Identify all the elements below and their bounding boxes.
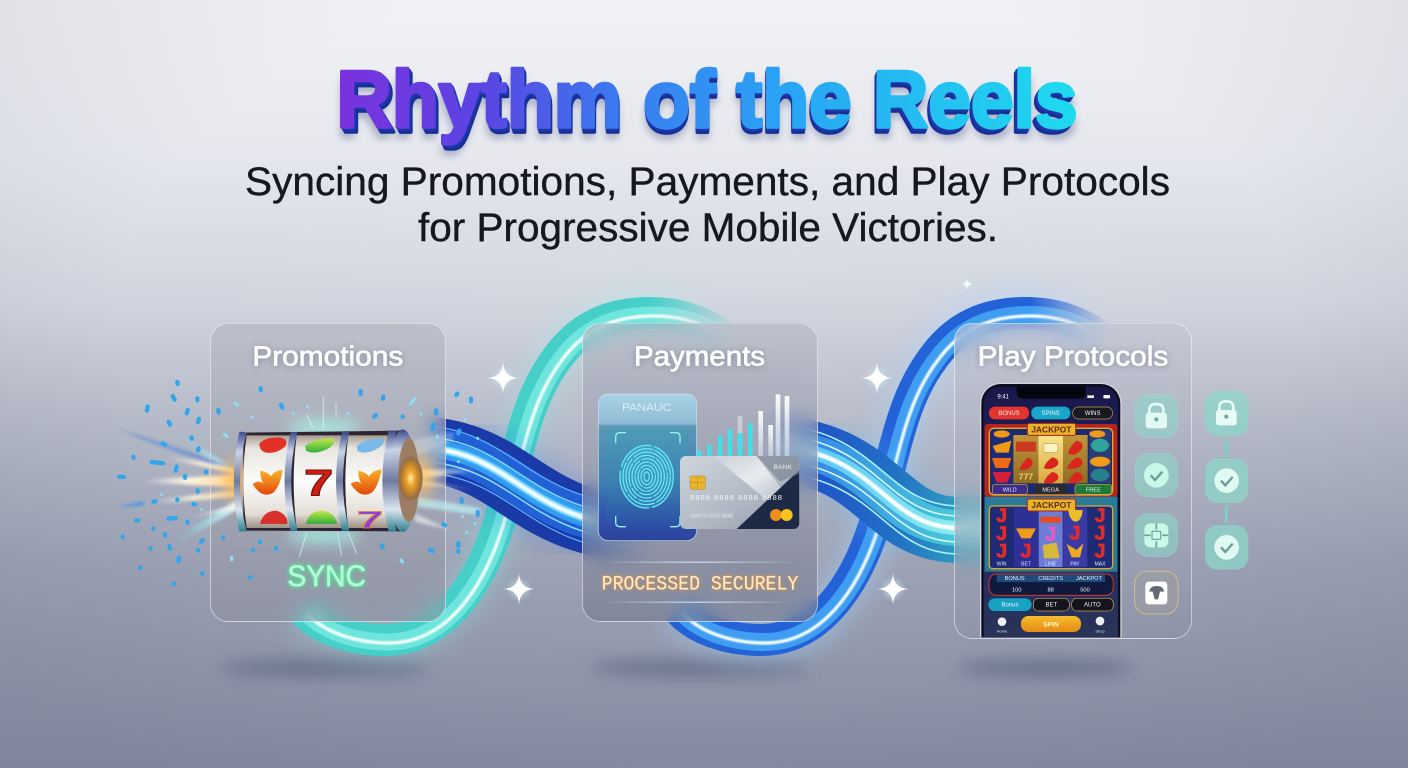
- slot game two: J: [996, 506, 1007, 526]
- phone with slot game: [980, 382, 1121, 659]
- slot game two: BET: [1021, 561, 1030, 567]
- action buttons: Bonus: [1001, 602, 1018, 608]
- subtitle: for Progressive Mobile Victories.: [418, 206, 998, 250]
- title: Rhythm of the Reels: [340, 60, 1074, 150]
- phone with slot game: 9:41: [997, 394, 1009, 400]
- slot game two: J: [996, 541, 1007, 562]
- heading: Promotions: Promotions: [252, 340, 403, 371]
- vertical rays: [299, 396, 356, 556]
- slot game two: JACKPOT: [1031, 500, 1071, 510]
- slot game two: PAY: [1070, 561, 1080, 567]
- flowing ribbons background: [225, 289, 1129, 684]
- glow around reel: [224, 420, 433, 542]
- SYNC label: SYNC: [287, 560, 365, 592]
- slot game two: J: [1094, 541, 1105, 562]
- icon: lock: [1205, 391, 1248, 436]
- spin button and side icons: Home: [996, 628, 1008, 633]
- reel symbols: [252, 437, 384, 534]
- icon: shield tile: [1134, 571, 1178, 614]
- heading: Payments: Payments: [634, 340, 764, 371]
- credit card: 8888 8888 8888 8888: [690, 492, 782, 502]
- title: Rhythm of the Reels: [337, 65, 1077, 155]
- credit card: CARDHOLDER NAME: [690, 513, 734, 519]
- slot game one: FREE: [1085, 487, 1101, 493]
- icon: grid: [1134, 513, 1177, 556]
- slot game two: MAX: [1094, 561, 1106, 567]
- bar chart: [696, 394, 789, 457]
- slot game two: LINE: [1045, 561, 1056, 567]
- slot game one: JACKPOT: [1031, 424, 1071, 434]
- reel symbols: 7: [304, 461, 333, 503]
- subtitle: Syncing Promotions, Payments, and Play Protocols: [245, 160, 1170, 204]
- icon: check: [1205, 525, 1248, 570]
- icon: check: [1205, 458, 1248, 503]
- bet panel: BONUS: [1004, 576, 1024, 582]
- confetti particles: [119, 382, 477, 584]
- icon: lock: [1134, 394, 1177, 438]
- panel: promotions: [210, 323, 446, 622]
- slot game one: WILD: [1002, 487, 1016, 493]
- title: Rhythm of the Reels: [336, 55, 1078, 145]
- top tabs: SPINS: [1041, 410, 1059, 416]
- slot game two: [984, 496, 1117, 571]
- blue loop ribbon: [679, 313, 1110, 643]
- title: Rhythm of the Reels: [340, 58, 1074, 148]
- bet panel: JACKPOT: [1075, 576, 1102, 582]
- slot game one: 777: [1018, 471, 1033, 481]
- slot game one: [984, 423, 1117, 496]
- slot game two: J: [1094, 523, 1105, 544]
- teal loop ribbon: [303, 313, 734, 643]
- title: Rhythm of the Reels: [338, 57, 1076, 147]
- slot game one: MEGA: [1042, 487, 1059, 493]
- spin button and side icons: [996, 616, 1105, 633]
- credit card: BANK: [773, 464, 792, 470]
- action buttons: BET: [1045, 602, 1057, 608]
- action buttons: [988, 598, 1113, 610]
- top tabs: [988, 406, 1112, 419]
- heading: Play Protocols: Play Protocols: [977, 340, 1168, 371]
- blue-teal wave ribbon payments to protocols: [760, 424, 1000, 554]
- bet panel: CREDITS: [1038, 576, 1063, 582]
- top tabs: WINS: [1084, 410, 1100, 416]
- processed securely label: PROCESSED SECURELY: [601, 573, 798, 596]
- floor shadows: [220, 660, 1133, 676]
- promotions panel artwork: [117, 340, 482, 592]
- top tabs: BONUS: [998, 410, 1019, 416]
- slot game two: WIN: [996, 561, 1006, 567]
- slot game two: J: [1045, 524, 1056, 545]
- action buttons: AUTO: [1084, 602, 1100, 608]
- panel: payments: [582, 323, 818, 622]
- icon: fingerprint: [620, 445, 673, 508]
- icon: slot machine reel: [233, 429, 422, 534]
- bet panel: [988, 574, 1113, 595]
- panel: play protocols: [954, 323, 1192, 639]
- protocol icon column: [1134, 394, 1178, 614]
- slot game two: J: [1094, 506, 1105, 526]
- fingerprint scanner card: [598, 394, 696, 540]
- reel symbols: 7: [356, 506, 383, 534]
- bet panel: 500: [1080, 587, 1089, 593]
- burst light rays: [116, 428, 480, 544]
- bet panel: 100: [1011, 587, 1021, 593]
- spin button and side icons: SPIN: [1043, 621, 1058, 628]
- play protocols panel artwork: [976, 340, 1178, 638]
- icon: check: [1134, 453, 1177, 497]
- credit card: [680, 456, 799, 528]
- spin button and side icons: Shop: [1095, 628, 1105, 633]
- slot game two: J: [996, 524, 1007, 544]
- bet panel: 88: [1047, 587, 1053, 593]
- slot game two: J: [1020, 541, 1031, 562]
- fingerprint scanner card: PANAUC: [622, 402, 671, 414]
- slot game two: J: [1069, 523, 1080, 544]
- payments panel artwork: [598, 340, 800, 603]
- blue wave ribbon promotions to payments: [410, 425, 660, 553]
